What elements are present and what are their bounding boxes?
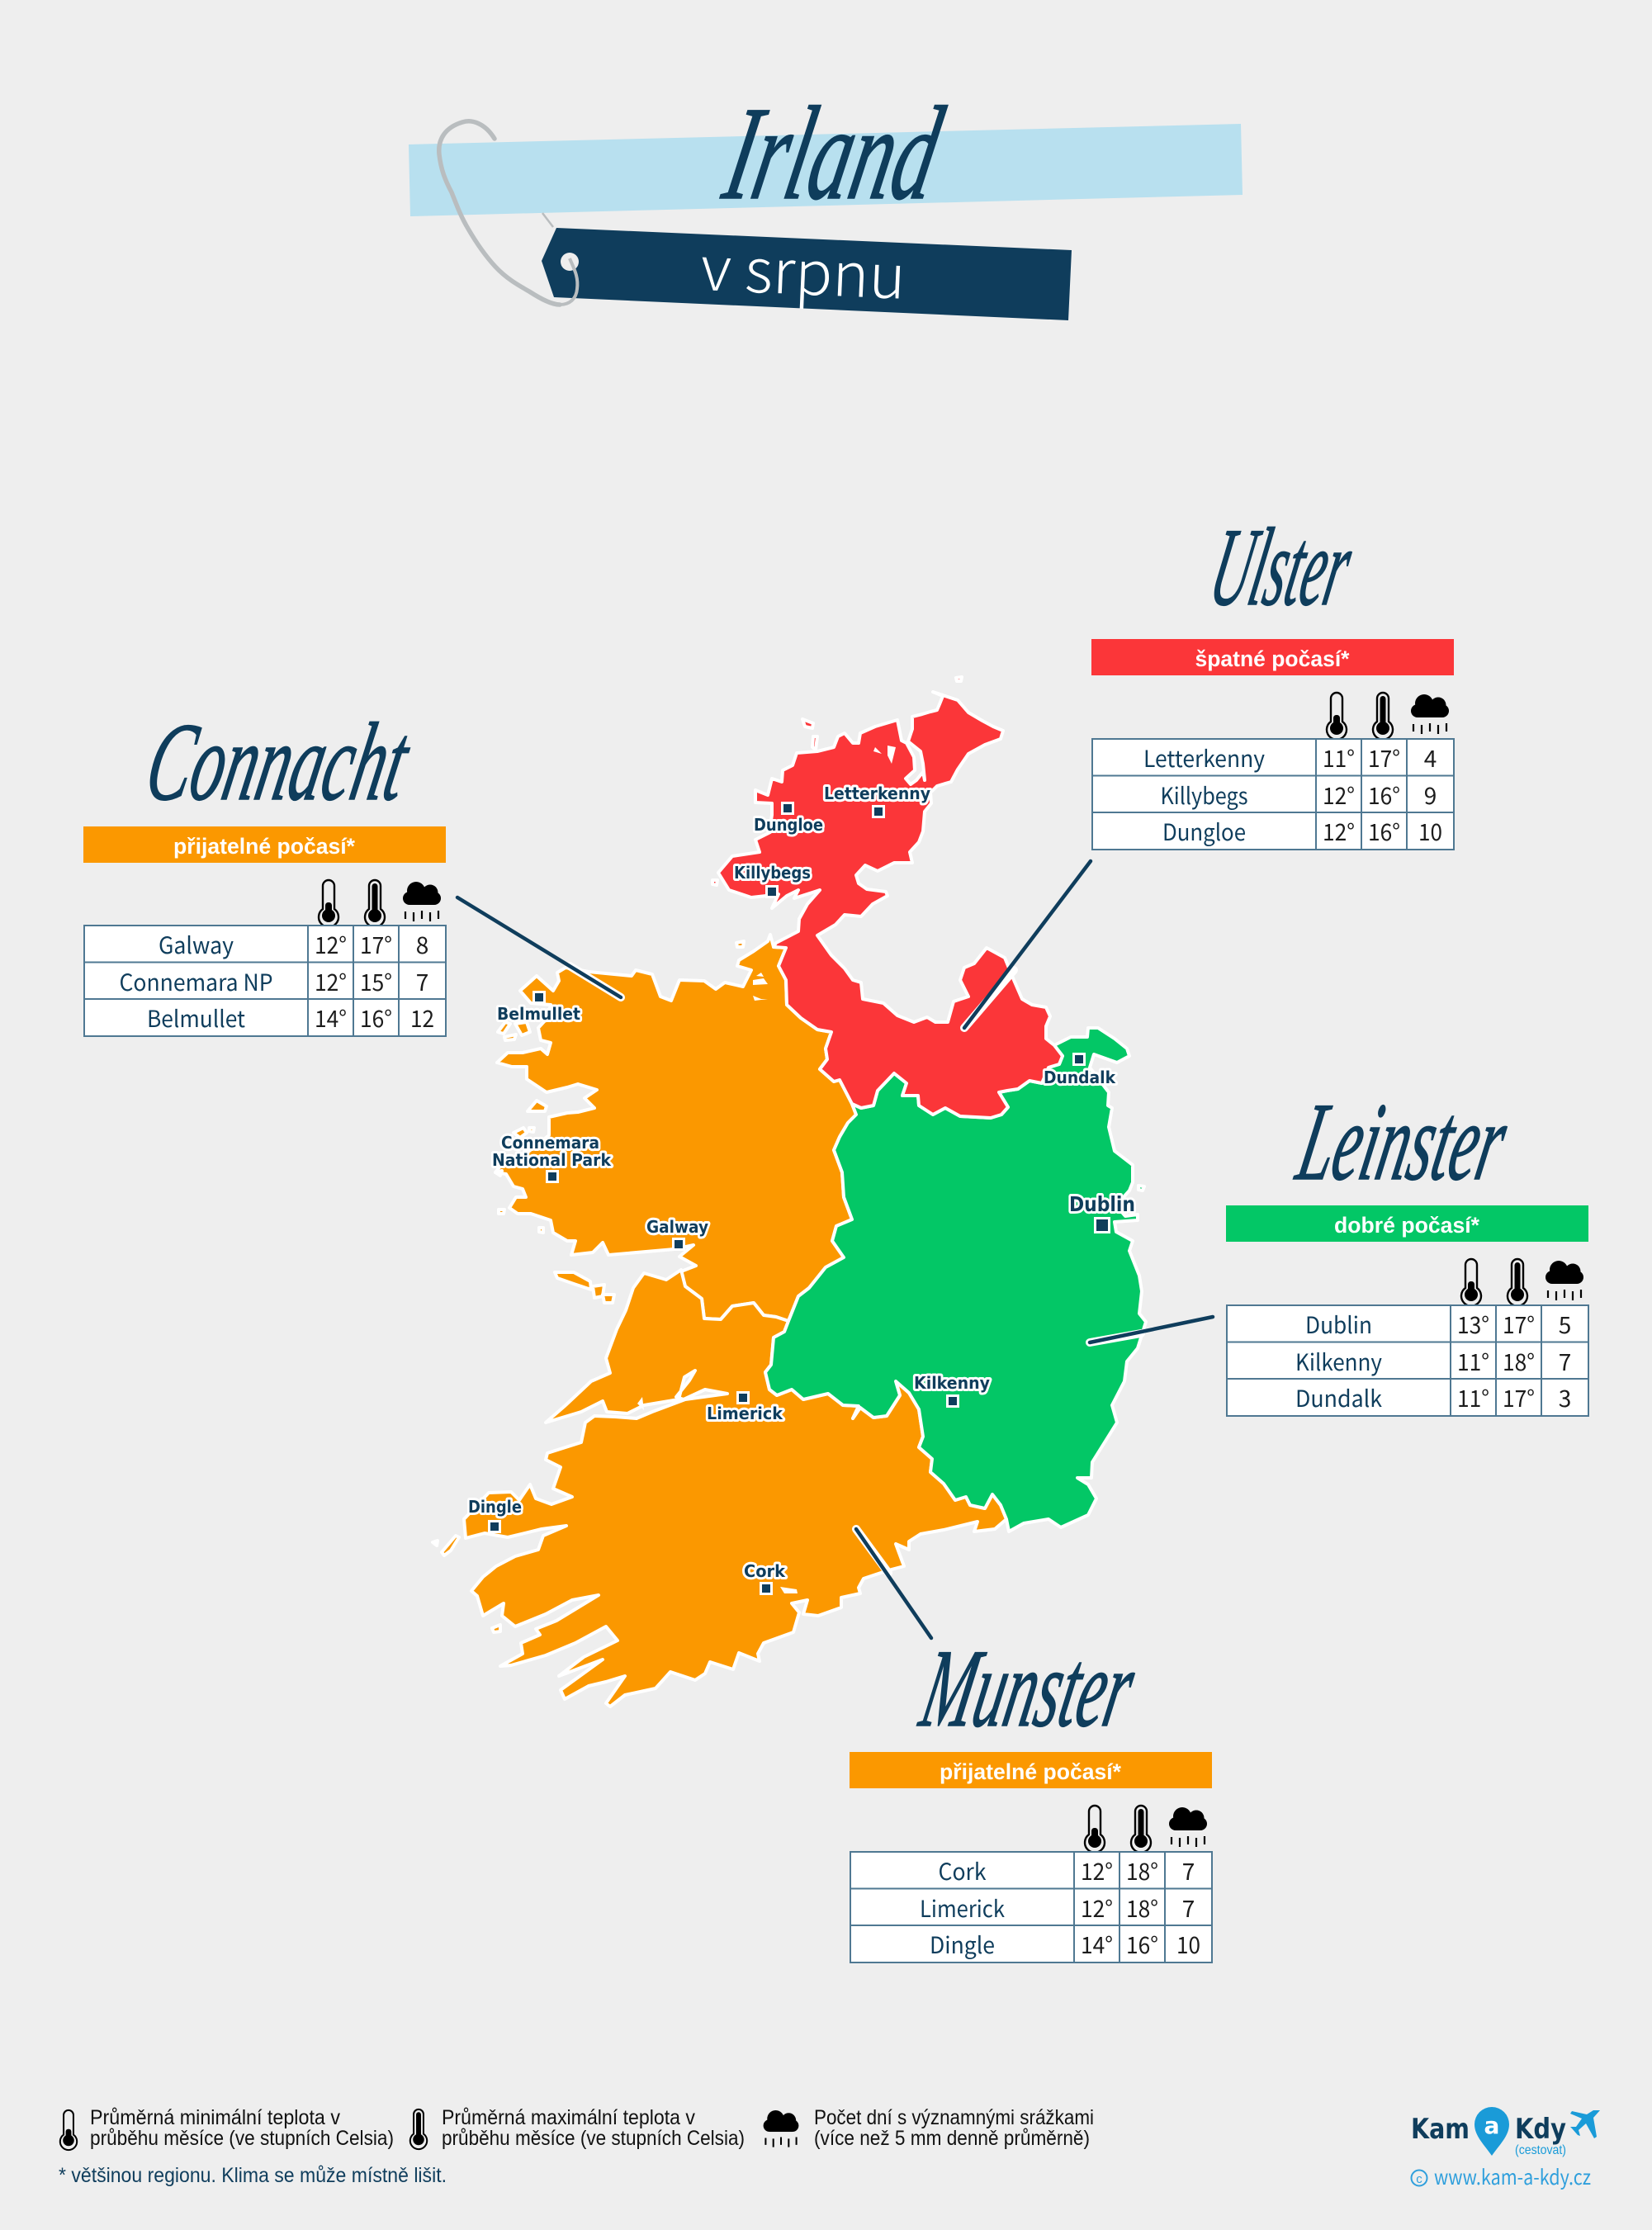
- navy tag: [542, 228, 1072, 320]
- legend text: minimum temperature: průběhu měsíce (ve stupních Celsia): [90, 2127, 394, 2150]
- leader line: Leinster: [1090, 1317, 1213, 1342]
- label: Dungloe: Dungloe: [754, 815, 823, 835]
- marker: Cork: [760, 1582, 773, 1595]
- marker: Kilkenny: [946, 1394, 959, 1408]
- weather banner: [850, 1752, 1212, 1788]
- heading: Connacht: Connacht: [137, 701, 420, 824]
- label: Belmullet: Belmullet: [497, 1004, 580, 1024]
- ring stub: [542, 213, 553, 227]
- icon: maximum temperature: [1373, 693, 1393, 740]
- label: Galway: Galway: [646, 1217, 708, 1237]
- tag string ring: [439, 121, 560, 305]
- icon: maximum temperature: [365, 880, 385, 927]
- label: Cork: Cork: [744, 1561, 786, 1581]
- table: 12°: [315, 928, 347, 961]
- table: [850, 1852, 1212, 1962]
- table: 17°: [1503, 1308, 1535, 1341]
- heading: Irland: Irland: [713, 79, 954, 228]
- label: Connemara National Park: National Park: [492, 1150, 612, 1170]
- legend text: rain days: (více než 5 mm denně průměrně): [814, 2127, 1090, 2150]
- marker: Dungloe: [781, 802, 794, 815]
- weather banner: [1091, 639, 1454, 675]
- icon: legend rain cloud: [764, 2110, 798, 2147]
- icon: plane: [1570, 2110, 1600, 2138]
- subheading: v srpnu: v srpnu: [699, 220, 907, 317]
- website: www.kam-a-kdy.cz: [1434, 2161, 1591, 2191]
- marker: Dublin: [1094, 1217, 1110, 1233]
- table: 14°: [1081, 1928, 1113, 1961]
- marker: Galway: [672, 1238, 685, 1251]
- island of Leinster: [1138, 1186, 1144, 1191]
- logo text: Kdy: Kdy: [1515, 2113, 1566, 2146]
- label: Kilkenny: Kilkenny: [914, 1373, 990, 1393]
- panel: Munster: [850, 1627, 1212, 1962]
- table: 3: [1559, 1381, 1571, 1414]
- table: [1227, 1305, 1588, 1416]
- logo: [1411, 2107, 1600, 2191]
- leader line: Munster: [856, 1529, 931, 1638]
- table: Killybegs: [1161, 779, 1248, 812]
- copyright symbol: [1412, 2170, 1427, 2186]
- table: 9: [1424, 779, 1437, 812]
- icon: minimum temperature: [1461, 1259, 1481, 1306]
- table: 15°: [360, 965, 392, 998]
- table: 10: [1176, 1928, 1200, 1961]
- inland water details: [637, 746, 896, 1593]
- label: Letterkenny: Letterkenny: [824, 784, 930, 803]
- legend text: maximum temperature: průběhu měsíce (ve stupních Celsia): [442, 2127, 745, 2150]
- icon: minimum temperature: [1085, 1806, 1105, 1853]
- table: 13°: [1457, 1308, 1489, 1341]
- banner text: dobré počasí*: [1334, 1213, 1479, 1238]
- table: 7: [1182, 1854, 1195, 1887]
- icon: rain cloud: [1411, 694, 1449, 734]
- table: Connemara NP: [119, 965, 272, 998]
- marker: Connemara National Park: [546, 1170, 559, 1183]
- table: 11°: [1323, 741, 1355, 774]
- table: 12: [410, 1001, 434, 1035]
- table: Galway: [159, 928, 234, 961]
- islands of Ulster: [712, 677, 962, 885]
- logo pin: [1474, 2107, 1509, 2156]
- table: Cork: [938, 1854, 987, 1887]
- leader line: Connacht: [457, 897, 621, 997]
- table: 17°: [1503, 1381, 1535, 1414]
- tag hole: [561, 253, 579, 271]
- label: Dingle: Dingle: [468, 1497, 522, 1517]
- table: 18°: [1126, 1891, 1158, 1925]
- icon: legend minimum temperature: [60, 2110, 77, 2150]
- label: Dublin: Dublin: [1069, 1192, 1135, 1216]
- table: 14°: [315, 1001, 347, 1035]
- marker: Limerick: [736, 1391, 750, 1404]
- legend text: rain days: Počet dní s významnými srážkami: [814, 2106, 1094, 2129]
- table: [1092, 739, 1454, 850]
- table: [84, 926, 446, 1036]
- banner text: špatné počasí*: [1195, 646, 1350, 671]
- marker: Letterkenny: [872, 805, 885, 818]
- logo text: Kam: Kam: [1411, 2113, 1470, 2146]
- table: Limerick: [920, 1891, 1005, 1925]
- label: Dundalk: Dundalk: [1044, 1068, 1116, 1087]
- label: Killybegs: Killybegs: [734, 863, 811, 883]
- table: 12°: [1081, 1891, 1113, 1925]
- region: Leinster: [765, 1028, 1146, 1532]
- heading: Leinster: Leinster: [1287, 1081, 1517, 1204]
- table: 16°: [360, 1001, 392, 1035]
- legend text: minimum temperature: [90, 2106, 394, 2150]
- title light blue band: [409, 124, 1243, 216]
- table: Kilkenny: [1295, 1345, 1382, 1378]
- marker: Dingle: [488, 1520, 501, 1533]
- marker: Killybegs: [765, 885, 779, 898]
- region: Munster: [464, 1270, 1006, 1707]
- icon: rain cloud: [403, 882, 441, 921]
- legend text: maximum temperature: Průměrná maximální teplota v: [442, 2106, 695, 2129]
- table: Dungloe: [1162, 815, 1246, 848]
- icon: minimum temperature: [319, 880, 338, 927]
- region: Ulster: [718, 692, 1063, 1118]
- table: Letterkenny: [1143, 741, 1265, 774]
- leader line: Ulster: [964, 861, 1091, 1028]
- table: 7: [1559, 1345, 1571, 1378]
- table: 16°: [1368, 779, 1400, 812]
- icon: legend maximum temperature: [410, 2109, 427, 2149]
- heading: Munster: Munster: [911, 1627, 1145, 1750]
- region: Connacht: [433, 935, 856, 1632]
- city markers and labels: [468, 784, 1135, 1595]
- icon: maximum temperature: [1131, 1806, 1151, 1853]
- table: 12°: [1323, 815, 1355, 848]
- marker: Dundalk: [1072, 1053, 1086, 1066]
- icon: maximum temperature: [1508, 1259, 1527, 1306]
- heading: Ulster: Ulster: [1201, 506, 1362, 629]
- table: 17°: [360, 928, 392, 961]
- table: 7: [1182, 1891, 1195, 1925]
- table: 11°: [1457, 1381, 1489, 1414]
- banner text: přijatelné počasí*: [173, 834, 355, 859]
- table: Dingle: [930, 1928, 995, 1961]
- logo tagline: (cestovat): [1515, 2143, 1566, 2157]
- weather banner: [1226, 1205, 1588, 1242]
- legend text: rain days: [814, 2106, 1094, 2150]
- table: 12°: [1323, 779, 1355, 812]
- table: 18°: [1503, 1345, 1535, 1378]
- map of Ireland: [433, 677, 1146, 1707]
- label: Connemara National Park: [492, 1133, 612, 1170]
- weather banner: [83, 826, 446, 863]
- table: 12°: [1081, 1854, 1113, 1887]
- table: 18°: [1126, 1854, 1158, 1887]
- table: 11°: [1457, 1345, 1489, 1378]
- legend text: minimum temperature: Průměrná minimální teplota v: [90, 2106, 340, 2129]
- table: 4: [1424, 741, 1437, 774]
- label: Connemara National Park: Connemara: [501, 1133, 599, 1153]
- copyright symbol: c: [1416, 2172, 1422, 2186]
- islands of Munster: [433, 1536, 500, 1632]
- table: 7: [416, 965, 428, 998]
- panel: Connacht: [83, 701, 446, 1036]
- icon: rain cloud: [1169, 1807, 1207, 1847]
- table: 8: [416, 928, 428, 961]
- icon: minimum temperature: [1327, 693, 1347, 740]
- ring end over tag: [560, 258, 577, 305]
- footnote: * většinou regionu. Klima se může místně lišit.: [59, 2164, 447, 2187]
- table: 12°: [315, 965, 347, 998]
- islands of Connacht: [495, 941, 744, 1303]
- logo pin letter: a: [1484, 2112, 1499, 2139]
- icon: rain cloud: [1545, 1261, 1583, 1300]
- marker: Belmullet: [533, 991, 546, 1004]
- table: 16°: [1368, 815, 1400, 848]
- label: Limerick: Limerick: [707, 1404, 783, 1423]
- table: Dundalk: [1295, 1381, 1383, 1414]
- table: Dublin: [1305, 1308, 1372, 1341]
- table: 10: [1418, 815, 1442, 848]
- panel: Leinster: [1226, 1081, 1588, 1416]
- table: 16°: [1126, 1928, 1158, 1961]
- legend text: maximum temperature: [442, 2106, 745, 2150]
- legend: [60, 2106, 1094, 2150]
- title: [409, 79, 1243, 320]
- table: 5: [1559, 1308, 1571, 1341]
- table: 17°: [1368, 741, 1400, 774]
- table: Belmullet: [147, 1001, 245, 1035]
- banner text: přijatelné počasí*: [940, 1759, 1121, 1784]
- panel: Ulster: [1091, 506, 1454, 850]
